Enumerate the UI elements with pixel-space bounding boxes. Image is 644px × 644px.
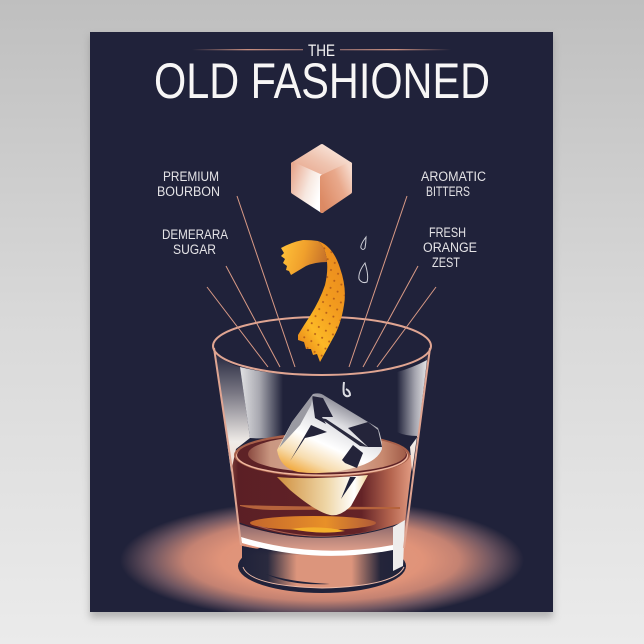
label: fresh orange zest: ORANGE <box>423 240 477 255</box>
title: THE: THE <box>308 41 335 60</box>
thick bottom of glass <box>238 520 405 551</box>
icon: sugar cube <box>293 146 350 211</box>
icon: orange zest <box>281 240 345 362</box>
label: demerara sugar: DEMERARA <box>162 227 228 242</box>
poster panel <box>90 32 553 620</box>
label: demerara sugar: SUGAR <box>173 242 216 257</box>
liquid surface <box>234 433 410 477</box>
glass back rim <box>213 317 431 346</box>
front rim <box>213 346 431 375</box>
label: premium bourbon: BOURBON <box>157 184 220 199</box>
icon: bitters drops <box>344 237 368 396</box>
submerged ice <box>277 475 368 515</box>
glass outline <box>214 348 241 545</box>
ice cube <box>277 393 382 473</box>
label: aromatic bitters: AROMATIC <box>421 169 486 184</box>
base shadow <box>238 539 406 593</box>
glass walls <box>215 351 250 472</box>
amber reflection <box>250 516 376 530</box>
poster shadow <box>90 36 553 618</box>
title: OLD FASHIONED: OLD FASHIONED <box>154 53 490 109</box>
label: fresh orange zest: FRESH <box>429 225 466 240</box>
white base line <box>241 537 403 556</box>
spotlight under glass <box>124 506 521 612</box>
base <box>242 546 403 588</box>
right wall highlight <box>393 520 405 571</box>
liquid <box>229 455 413 538</box>
label: fresh orange zest: ZEST <box>432 255 460 270</box>
label: aromatic bitters: BITTERS <box>426 184 470 199</box>
reflection strips <box>240 367 283 438</box>
whiskey glass <box>213 346 431 593</box>
label: premium bourbon: PREMIUM <box>163 169 219 184</box>
ingredient lines <box>207 196 436 367</box>
